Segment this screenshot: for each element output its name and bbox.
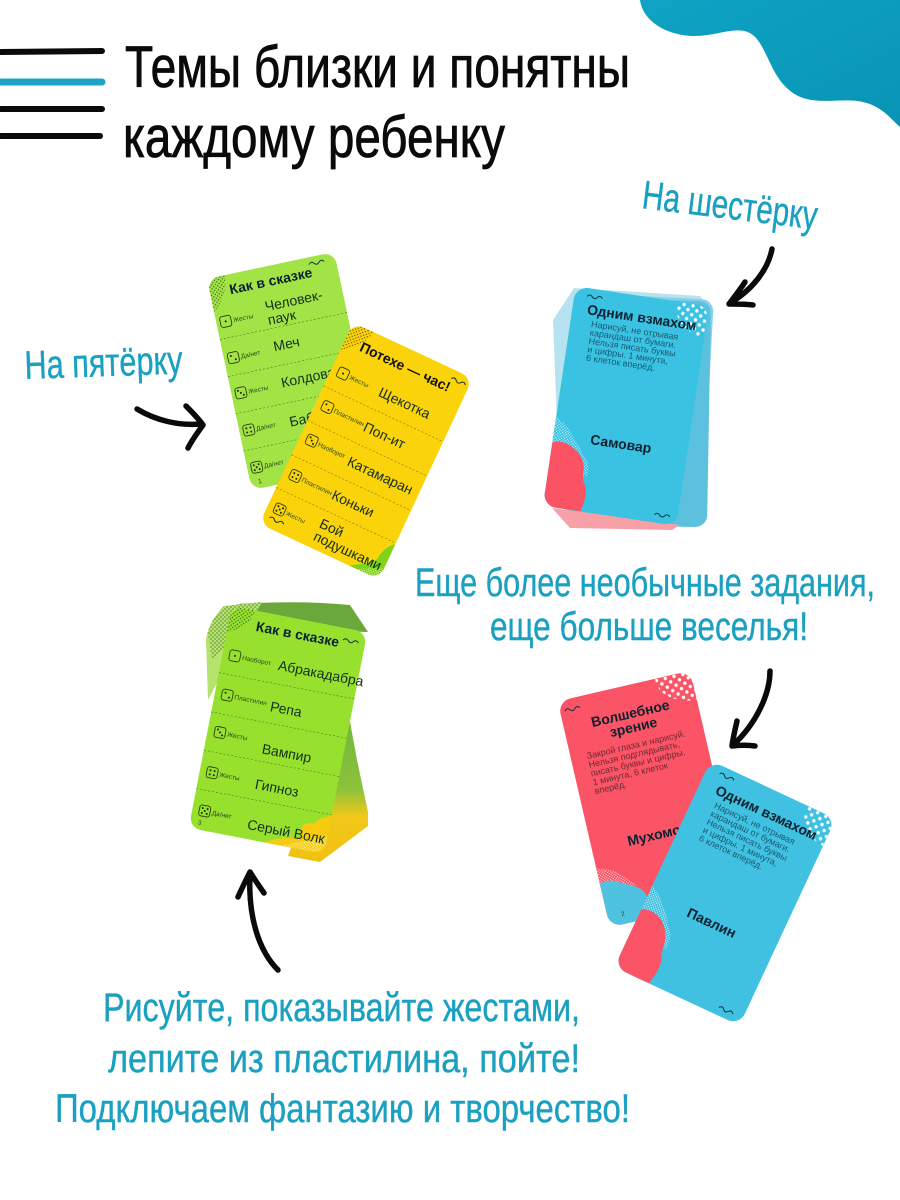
card: blue Одним взмахом Павлин (614, 761, 836, 1025)
card: blue Одним взмахом Павлин: Нарисуй, не отрывая (713, 800, 797, 847)
card: blue Одним взмахом top of stack: 6 клеток вперёд. (585, 353, 656, 373)
card: blue Одним взмахом Павлин: Павлин (685, 904, 739, 941)
card: red Волшебное зрение: 1 минута, 6 клеток (592, 760, 669, 787)
card: green Как в сказке top of stack (189, 606, 373, 855)
arrow: up to green stack (238, 872, 278, 970)
card: blue Одним взмахом top of stack: Самовар (589, 431, 653, 456)
card: yellow Потехе — час: Коньки (329, 487, 377, 520)
card: blue Одним взмахом Павлин: 6 клеток вперёд. (697, 833, 765, 871)
caption: На шестёрку: На шестёрку (640, 173, 820, 238)
caption: Рисуйте, показывайте жестами (55, 986, 630, 1131)
title (123, 35, 630, 170)
card: blue Одним взмахом top of stack (543, 286, 709, 526)
card: yellow Потехе — час: Жесты (285, 510, 306, 526)
caption: Еще более необычные задания: еще больше веселья! (490, 605, 808, 649)
card: yellow Потехе — час: Щекотка (376, 384, 433, 422)
caption: Еще более необычные задания (415, 561, 875, 649)
card: blue Одним взмахом top of stack: Нельзя писать буквы (588, 336, 676, 359)
title: Темы близки и понятны (125, 35, 630, 100)
card: red Волшебное зрение: писать буквы и цифры. (590, 747, 686, 779)
arrow: to green and yellow cards (137, 406, 203, 448)
card: green Как в сказке top of stack: Жесты (219, 772, 240, 783)
card: green Как в сказке: паук (266, 306, 298, 328)
card: yellow Потехе — час: Наоборот (317, 441, 347, 460)
card: red Волшебное зрение: 2 (621, 911, 626, 918)
card: red Волшебное зрение: вперёд. (594, 779, 628, 796)
caption: Рисуйте, показывайте жестами: Рисуйте, показывайте жестами, (103, 986, 580, 1030)
card: yellow Потехе — час: Поп-ит (361, 419, 409, 452)
card: green Как в сказке top of stack: 3 (197, 819, 202, 827)
card: green Как в сказке top of stack: Да/нет (211, 810, 232, 821)
caption: Рисуйте, показывайте жестами: Подключаем фантазию и творчество! (55, 1087, 630, 1131)
card stack: blue back edges (552, 288, 714, 530)
arrow: to red and blue cards (732, 671, 770, 746)
card: green Как в сказке: Меч (272, 333, 301, 354)
card: yellow Потехе — час: Пластилин (332, 408, 366, 428)
card: yellow Потехе — час (259, 323, 473, 579)
card: blue Одним взмахом Павлин: Нельзя писать буквы (705, 817, 789, 863)
card: yellow Потехе — час: подушками (311, 528, 384, 573)
card: green Как в сказке: Жесты (233, 313, 254, 324)
card: blue Одним взмахом top of stack: Одним взмахом (586, 301, 697, 333)
card: green Как в сказке: 1 (258, 478, 263, 486)
card: red Волшебное зрение: Нельзя подглядывать, (588, 739, 681, 770)
card: green Как в сказке: Да/нет (240, 349, 261, 360)
card: green Как в сказке: Как в сказке (228, 264, 314, 297)
title: каждому ребенку (123, 105, 505, 170)
card: blue Одним взмахом top of stack: и цифры. 1 минута, (587, 344, 669, 366)
card: red Волшебное зрение: Мухомор (626, 819, 690, 849)
card: yellow Потехе — час: Жесты (348, 374, 370, 390)
card: green Как в сказке top of stack: Гипноз (254, 776, 300, 800)
card: red Волшебное зрение: Волшебное (589, 696, 671, 730)
card: red Волшебное зрение (560, 673, 712, 925)
card: green Как в сказке top of stack: Абракадабра (277, 657, 365, 689)
card: yellow Потехе — час: Бой (317, 515, 346, 540)
caption: На пятёрку: На пятёрку (24, 339, 183, 388)
card: blue Одним взмахом Павлин: Одним взмахом (713, 782, 820, 843)
card: blue Одним взмахом Павлин: карандаш от бумаги. (709, 809, 792, 854)
card: green Как в сказке (209, 254, 351, 488)
card: green Как в сказке: Жесты (248, 384, 269, 396)
card: green Как в сказке: Да/нет (264, 459, 284, 470)
card: red Волшебное зрение: Закрой глаза и нарисуй. (586, 729, 686, 761)
card: yellow Потехе — час: Пластилин (300, 477, 333, 497)
card: green Как в сказке: Да/нет (256, 422, 276, 433)
card: blue Одним взмахом top of stack: карандаш от бумаги. (589, 327, 677, 350)
card: green Как в сказке top of stack: Как в сказке (255, 618, 341, 650)
arrow: to blue stack (729, 249, 772, 305)
card: green Как в сказке top of stack: Серый Волк (246, 816, 327, 847)
card: green Как в сказке top of stack: Пластилин (234, 694, 268, 707)
card: green Как в сказке top of stack: Наоборот (241, 654, 272, 667)
card: red Волшебное зрение: зрение (608, 714, 659, 740)
icon: menu lines (1, 51, 102, 136)
card: green Как в сказке top of stack: Жесты (226, 731, 248, 742)
caption: Рисуйте, показывайте жестами: лепите из пластилина, пойте! (108, 1037, 580, 1081)
card: green Как в сказке top of stack: Вампир (261, 740, 313, 766)
card: green Как в сказке: Колдовать (280, 361, 350, 391)
card: green Как в сказке top of stack: Репа (269, 698, 303, 720)
card: yellow Потехе — час: Катамаран (345, 453, 416, 497)
card stack: green back edges (206, 602, 368, 862)
decorative corner wave blob (640, 0, 900, 127)
card: green Как в сказке: Баба-яга (288, 402, 347, 430)
card: green Как в сказке: Человек- (263, 286, 324, 314)
card: blue Одним взмахом top of stack: Нарисуй, не отрывая (591, 319, 679, 342)
card: yellow Потехе — час: Потехе — час! (357, 339, 453, 395)
card: blue Одним взмахом Павлин: и цифры. 1 минута, (701, 825, 779, 868)
